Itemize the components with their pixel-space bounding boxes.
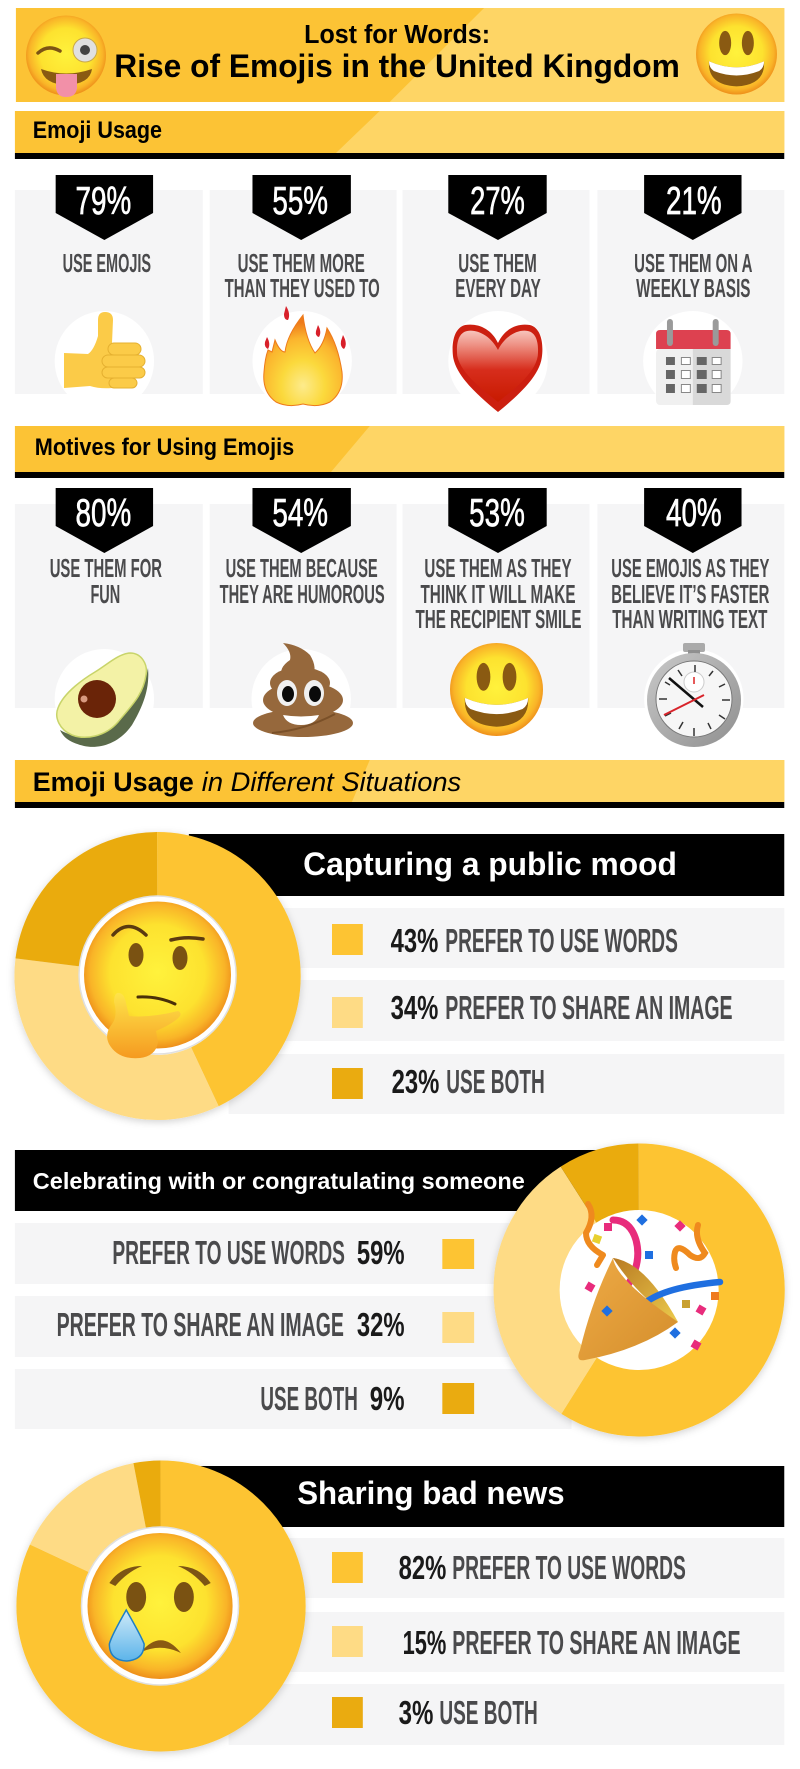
- panel: capturing a public mood: [47, 834, 784, 1114]
- title text: Lost for Words:: [304, 21, 490, 49]
- panel: 80% for fun: USE THEM FOR: [50, 555, 162, 583]
- panel: 27% every day: [403, 175, 589, 412]
- panel: 55% use them more: [210, 175, 397, 411]
- panel: 80% for fun: 80%: [76, 492, 131, 535]
- heading bar: capturing a public mood: [189, 834, 784, 896]
- panel: 27% every day: 27%: [470, 180, 525, 223]
- legend rows: celebrating: USE BOTH: [260, 1380, 358, 1417]
- legend rows: celebrating: PREFER TO USE WORDS: [112, 1234, 345, 1271]
- section header: Emoji Usage: [15, 111, 784, 159]
- icon: stopwatch: [647, 643, 741, 747]
- panel: sharing bad news: [50, 1466, 784, 1745]
- icon: calendar: [656, 319, 731, 405]
- heading bar: celebrating: [15, 1150, 601, 1211]
- panel: 53% make the recipient smile: THINK IT WILL MAKE: [420, 581, 576, 609]
- legend rows: capturing a public mood: 23%: [392, 1063, 439, 1100]
- panel: 27% every day: EVERY DAY: [455, 275, 541, 303]
- legend rows: capturing a public mood: 34%: [391, 989, 438, 1026]
- legend rows: celebrating: 32%: [357, 1306, 405, 1343]
- panel: 79% use emojis: USE EMOJIS: [63, 250, 151, 278]
- section header: Emoji Usage in Different Situations: Emoji Usage: [33, 767, 194, 797]
- panel: 40% faster than writing: 40%: [666, 492, 722, 535]
- legend rows: capturing a public mood: USE BOTH: [446, 1063, 545, 1100]
- icon: crying face: [87, 1533, 233, 1679]
- panel: 54% humorous: THEY ARE HUMOROUS: [220, 581, 385, 609]
- panel: 53% make the recipient smile: THE RECIPIENT SMILE: [415, 606, 581, 634]
- icon: thinking face: [84, 902, 231, 1058]
- donut chart: capturing a public mood: [47, 864, 268, 1088]
- title text: [114, 21, 680, 84]
- section header: Emoji Usage in Different Situations: in Different Situations: [202, 767, 461, 797]
- panel: 80% for fun: [15, 488, 203, 749]
- panel: 80% for fun: FUN: [90, 581, 120, 609]
- legend rows: sharing bad news: USE BOTH: [439, 1694, 538, 1731]
- panel: 55% use them more: THAN THEY USED TO: [225, 275, 380, 303]
- panel: 21% weekly: [597, 175, 784, 411]
- panel: 40% faster than writing: [597, 488, 784, 749]
- legend rows: sharing bad news: 82%: [399, 1549, 446, 1586]
- legend rows: capturing a public mood: 43%: [391, 922, 438, 959]
- panel: 53% make the recipient smile: USE THEM AS THEY: [424, 555, 572, 583]
- donut chart: sharing bad news: [50, 1494, 272, 1718]
- icon: fire: [264, 306, 346, 406]
- heading bar: sharing bad news: Sharing bad news: [297, 1475, 565, 1511]
- panel: 21% weekly: 21%: [666, 180, 722, 223]
- icon: party popper: [578, 1204, 720, 1360]
- heading bar: sharing bad news: [189, 1466, 784, 1527]
- icon: smiling face: [450, 643, 543, 736]
- panel: 53% make the recipient smile: 53%: [469, 492, 525, 535]
- legend rows: celebrating: [15, 1223, 572, 1429]
- panel: 55% use them more: USE THEM MORE: [238, 250, 365, 278]
- title text: Rise of Emojis in the United Kingdom: [114, 48, 680, 84]
- legend rows: celebrating: 9%: [370, 1380, 405, 1417]
- panel: 79% use emojis: 79%: [76, 180, 131, 223]
- title banner: [16, 8, 784, 102]
- section header: Emoji Usage: Emoji Usage: [33, 117, 162, 144]
- heading bar: celebrating: Celebrating with or congratulating someone: [33, 1168, 525, 1194]
- legend rows: capturing a public mood: [229, 908, 784, 1114]
- panel: 54% humorous: USE THEM BECAUSE: [226, 555, 378, 583]
- section header: Emoji Usage in Different Situations: [15, 760, 784, 808]
- legend rows: celebrating: PREFER TO SHARE AN IMAGE: [57, 1306, 344, 1343]
- panel: 53% make the recipient smile: [403, 488, 589, 736]
- heading bar: capturing a public mood: Capturing a public mood: [303, 846, 677, 882]
- legend rows: celebrating: 59%: [357, 1234, 405, 1271]
- panel: celebrating with or congratulating someone: [15, 1150, 751, 1429]
- panel: 55% use them more: 55%: [272, 180, 328, 223]
- section header: Motives for Using Emojis: [15, 426, 784, 478]
- panel: 54% humorous: [210, 488, 397, 749]
- panel: 27% every day: USE THEM: [458, 250, 537, 278]
- legend rows: sharing bad news: 15%: [403, 1624, 446, 1661]
- donut chart: celebrating: [527, 1177, 751, 1403]
- legend rows: sharing bad news: 3%: [399, 1694, 433, 1731]
- icon: pile of poo: [253, 643, 353, 737]
- icon: red heart: [453, 325, 542, 412]
- section header: Motives for Using Emojis: Motives for Using Emojis: [35, 434, 294, 461]
- panel: 54% humorous: 54%: [272, 492, 328, 535]
- icon: winking face with tongue: [26, 16, 106, 97]
- panel: 79% use emojis: [15, 175, 203, 411]
- icon: smiling face: [696, 14, 777, 94]
- legend rows: sharing bad news: [229, 1538, 784, 1745]
- icon: avocado: [57, 653, 148, 747]
- icon: thumbs up: [64, 312, 145, 388]
